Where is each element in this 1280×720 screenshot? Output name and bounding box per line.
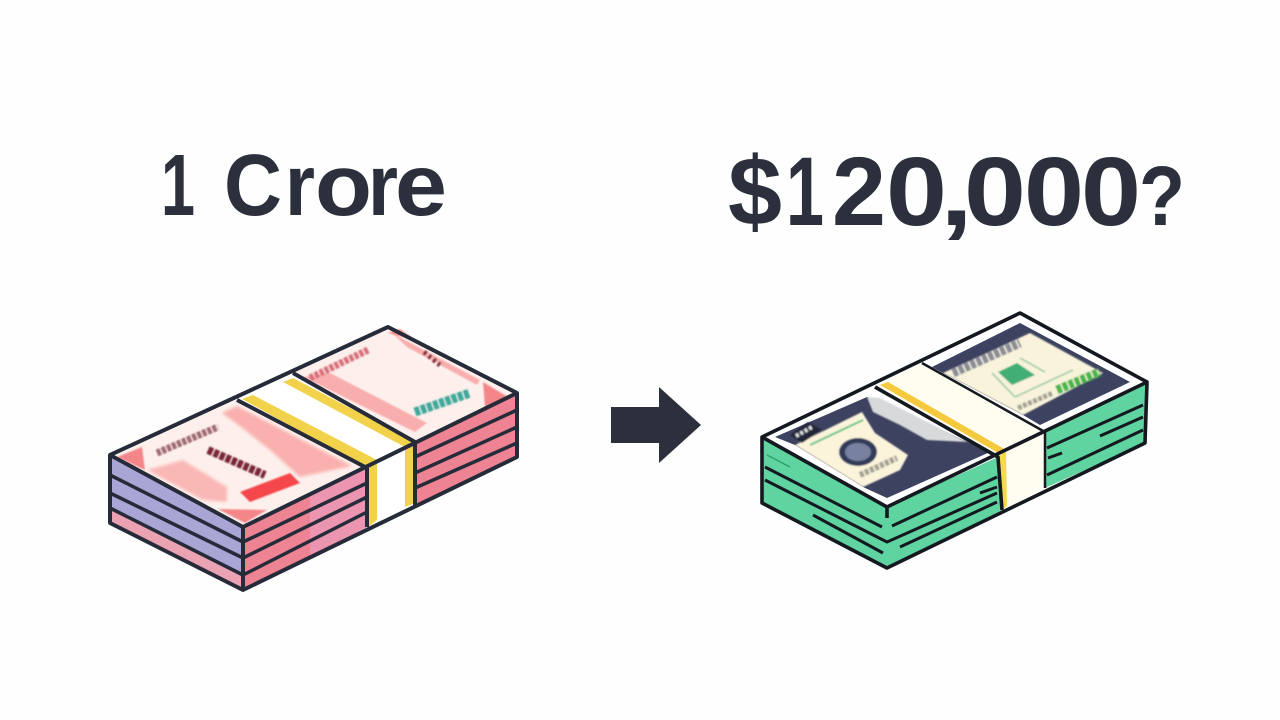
title: 1 Crore: o xyxy=(315,137,372,234)
arrow xyxy=(611,387,701,463)
dollar stack: top right note xyxy=(922,313,1147,432)
title: 1 Crore: C xyxy=(224,137,282,234)
title: $120,000?: , xyxy=(940,137,973,246)
title: $120,000?: 0 xyxy=(1081,137,1141,246)
title: $120,000?: ? xyxy=(1139,149,1185,243)
title: $120,000?: 2 xyxy=(832,137,886,246)
title: 1 Crore xyxy=(161,137,447,234)
title: $120,000?: 1 xyxy=(786,137,824,246)
title: 1 Crore: 1 xyxy=(161,137,195,234)
rupee stack: left side layers xyxy=(110,455,243,590)
icon: stack of dollar notes xyxy=(762,313,1147,568)
title: $120,000? xyxy=(728,137,1185,246)
title: $120,000?: 0 xyxy=(886,137,947,246)
dollar stack: outline xyxy=(762,313,1147,568)
title: 1 Crore: e xyxy=(395,137,447,234)
dollar stack: side layers xyxy=(762,382,1147,568)
dollar stack: top left note xyxy=(762,387,998,507)
dollar stack: paper band xyxy=(875,363,1045,510)
rupee stack: top left note xyxy=(110,400,367,527)
title: $120,000?: $ xyxy=(728,137,782,246)
icon: stack of rupee notes xyxy=(110,327,517,590)
title: $120,000?: 0 xyxy=(964,137,1026,246)
rupee stack: right side layers xyxy=(243,393,517,590)
rupee stack: paper band xyxy=(237,373,415,527)
title: 1 Crore: r xyxy=(368,137,398,234)
rupee stack: outline xyxy=(110,327,517,590)
title: 1 Crore: r xyxy=(285,137,315,234)
title: $120,000?: 0 xyxy=(1024,137,1084,246)
rupee stack: top right note xyxy=(293,327,517,442)
